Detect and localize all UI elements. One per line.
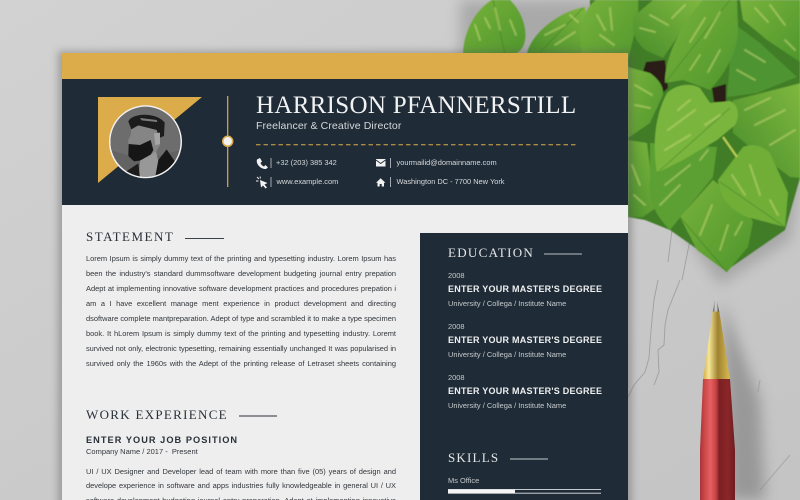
- statement text: survived only the 1960s with the Adept of the printing release of Letraset sheets containing: [86, 358, 396, 368]
- education entry 2: [448, 322, 602, 359]
- statement text: been the industry's standard dummsoftware development budgeting journal entry prepation: [86, 269, 396, 278]
- work experience text: develope experience in software and apps industries fully knowledgeable in general UI / UX: [86, 481, 396, 490]
- gold top band: [62, 53, 628, 79]
- skills rule: [510, 458, 548, 460]
- leaf veins: [475, 5, 795, 250]
- education entry 2: ENTER YOUR MASTER'S DEGREE: [448, 335, 602, 345]
- dark header panel: [62, 79, 628, 205]
- company: Company Name / 2017 - Present: [86, 447, 198, 456]
- contact separators: [271, 158, 390, 187]
- dark sidebar panel: [420, 233, 628, 500]
- icon: phone: [257, 158, 268, 169]
- gold triangle: [98, 97, 202, 183]
- education entry 3: [448, 373, 602, 410]
- plant shadow: [460, 0, 800, 285]
- email: yourmailid@domainname.com: [396, 158, 497, 167]
- education entry 3: University / Collega / Institute Name: [448, 401, 566, 410]
- pen shadow: [722, 300, 765, 500]
- icon: envelope: [376, 159, 386, 166]
- statement text: am a I have excellent manage ment experience in product development and directing: [86, 299, 396, 308]
- portrait photo: [108, 105, 184, 179]
- education entry 3: 2008: [448, 373, 465, 382]
- education entry 2: 2008: [448, 322, 465, 331]
- icon: house: [376, 178, 386, 186]
- statement text: book. It hLorem Ipsum is simply dummy text of the printing and typesetting industry. Loremt: [86, 328, 396, 338]
- education entry 1: 2008: [448, 271, 465, 280]
- statement text: Adept at implementing innovative software development practices and procedures prepation i: [86, 284, 396, 293]
- statement text: dsoftware complete mantpreparation. Adept of type and scrambled it to make a type specimen: [86, 314, 396, 323]
- heading: work experience: WORK EXPERIENCE: [86, 407, 228, 422]
- address: Washington DC - 7700 New York: [396, 177, 504, 186]
- work experience rule: [239, 415, 277, 417]
- education entry 2: University / Collega / Institute Name: [448, 350, 566, 359]
- statement text: survived not only, electronic typesetting, remaining essentially unchanged It was popularised in: [86, 344, 396, 352]
- skill bar: Ms Office: [448, 490, 601, 494]
- education entry 3: ENTER YOUR MASTER'S DEGREE: [448, 386, 602, 396]
- plant leaves: [463, 0, 800, 272]
- work experience text: UI / UX Designer and Developer lead of team with more than five (05) years of design and: [86, 466, 396, 476]
- education entry 1: University / Collega / Institute Name: [448, 299, 566, 308]
- heading: statement: STATEMENT: [86, 229, 174, 244]
- statement text: Lorem Ipsum is simply dummy text of the printing and typesetting industry. Lorem Ipsum has: [86, 254, 396, 263]
- job position: ENTER YOUR JOB POSITION: [86, 435, 238, 445]
- page shadow: [58, 51, 632, 500]
- timeline divider: [223, 96, 233, 187]
- education entry 1: [448, 271, 602, 308]
- header graphics: portrait and timeline: [98, 96, 601, 494]
- job title: Freelancer & Creative Director: [256, 120, 401, 132]
- icon: cursor: [256, 176, 268, 188]
- heading: education: EDUCATION: [448, 245, 534, 260]
- education entry 1: ENTER YOUR MASTER'S DEGREE: [448, 284, 602, 294]
- pen: [700, 295, 735, 500]
- skill label: Ms Office: [448, 476, 479, 485]
- dashed rule: [256, 144, 576, 146]
- resume page: [62, 53, 628, 500]
- statement text: [86, 254, 396, 368]
- name: HARRISON PFANNERSTILL: [256, 92, 576, 118]
- phone: +32 (203) 385 342: [276, 158, 337, 167]
- heading: skills: SKILLS: [448, 450, 499, 465]
- cracks: [628, 230, 690, 397]
- education rule: [544, 253, 582, 255]
- website: www.example.com: [276, 177, 338, 186]
- statement rule: [185, 238, 224, 240]
